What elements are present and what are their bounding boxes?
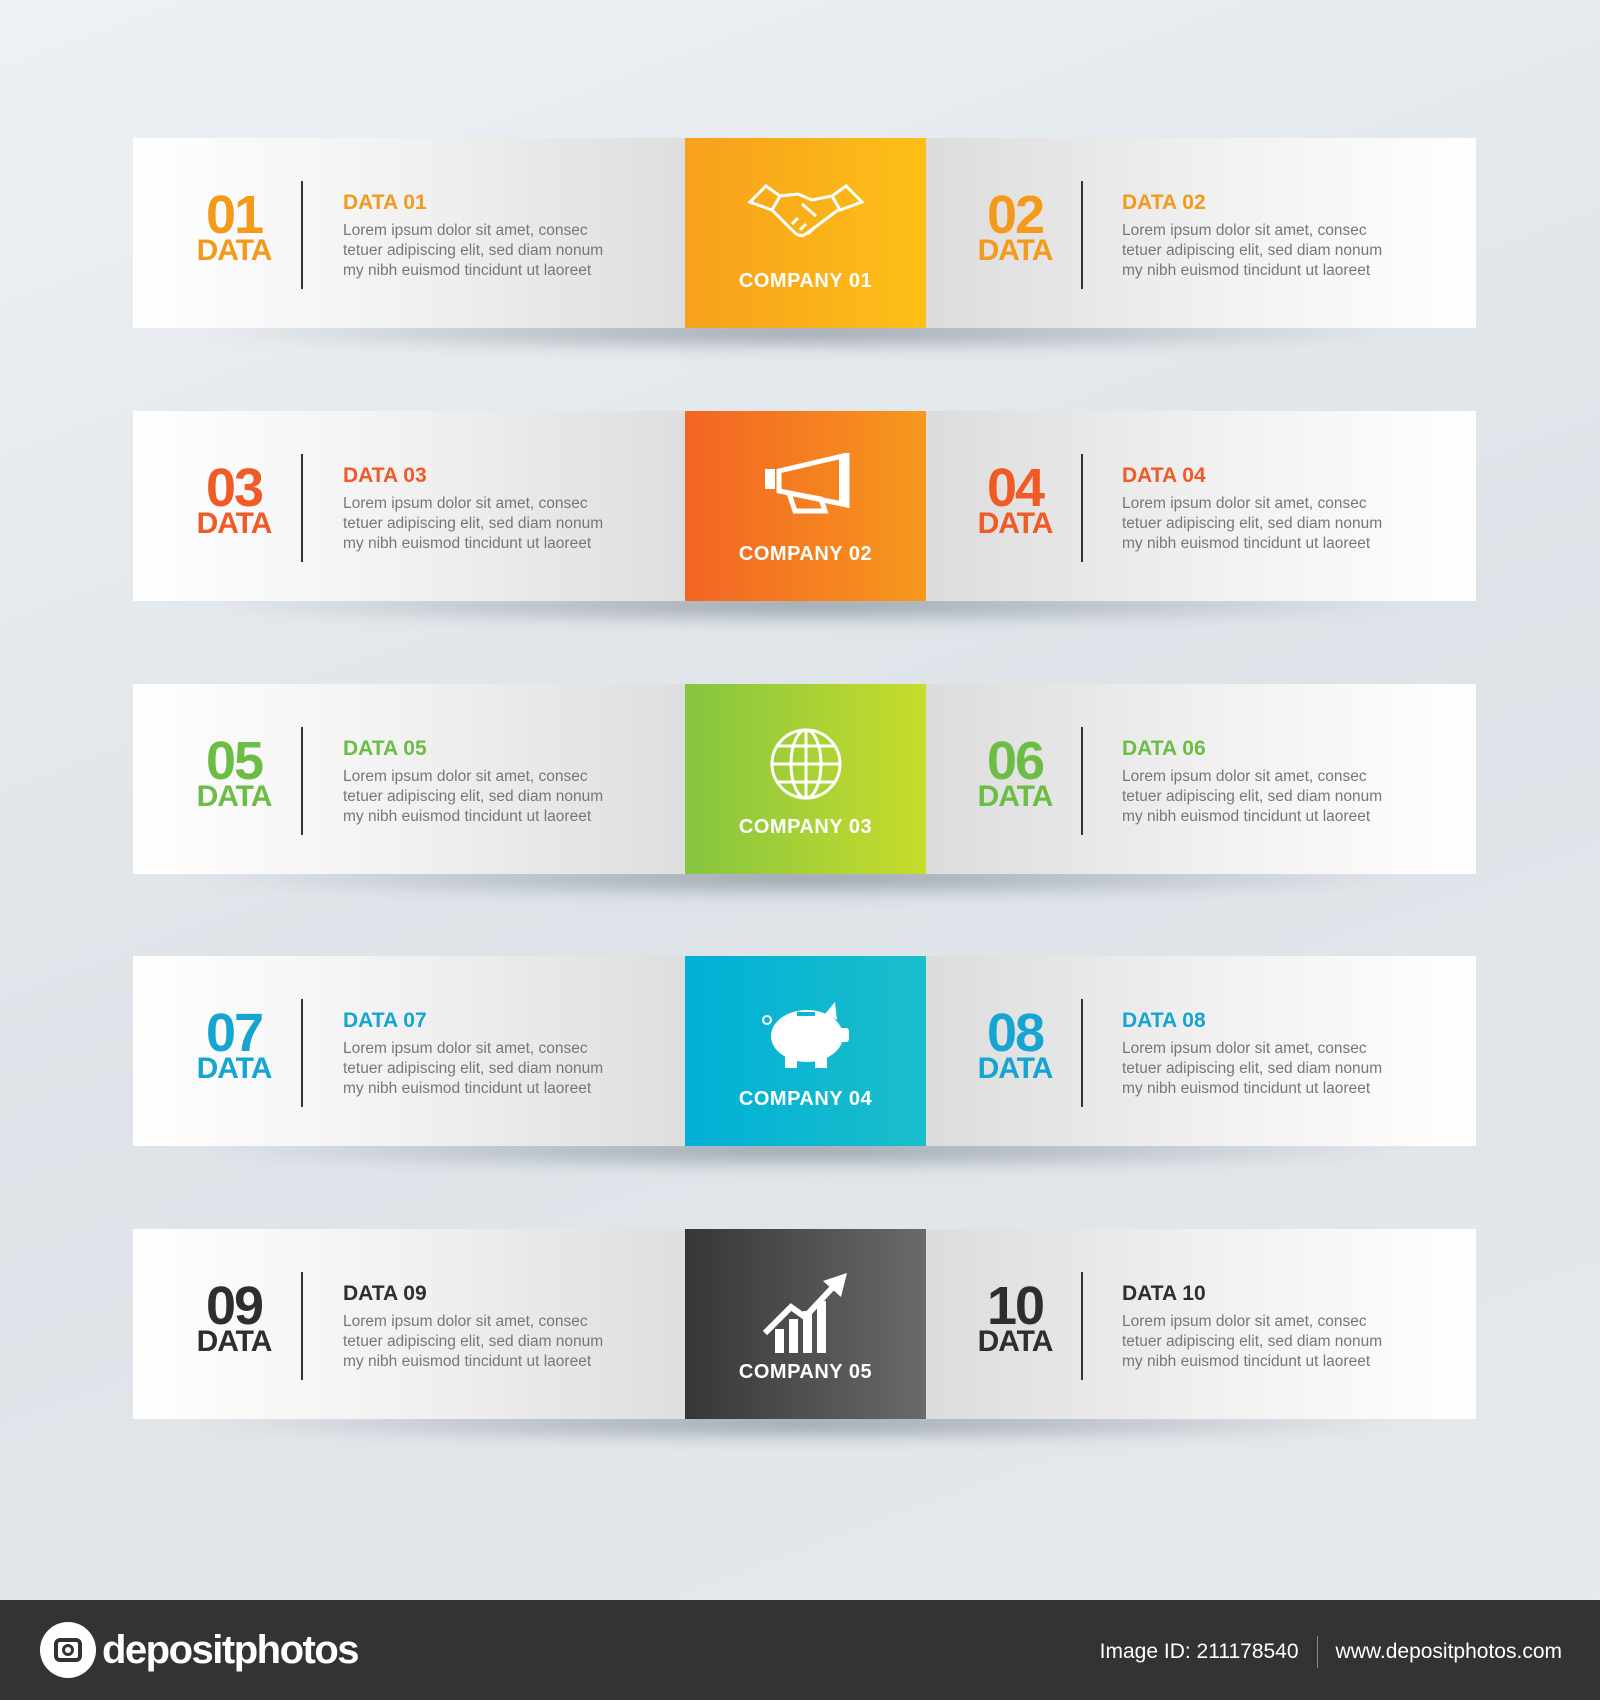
number 04 xyxy=(978,458,1053,540)
center: company 03 xyxy=(685,684,926,874)
panel: data 09 xyxy=(133,1229,685,1419)
footer info: Image ID: 211178540 xyxy=(1100,1640,1299,1663)
center: company 02: COMPANY 02 xyxy=(739,543,872,565)
text: data 08: Lorem ipsum dolor sit amet, consec xyxy=(1122,1040,1367,1057)
number 03: 03 xyxy=(206,458,262,518)
text: data 08: my nibh euismod tincidunt ut laoreet xyxy=(1122,1080,1370,1097)
text: data 05: DATA 05 xyxy=(343,737,427,760)
number 03: DATA xyxy=(197,507,271,540)
number 02: 02 xyxy=(987,185,1043,245)
text: data 05: tetuer adipiscing elit, sed diam nonum xyxy=(343,788,603,805)
text: data 10: my nibh euismod tincidunt ut laoreet xyxy=(1122,1353,1370,1370)
text: data 10: DATA 10 xyxy=(1122,1282,1206,1305)
text: data 07: Lorem ipsum dolor sit amet, consec xyxy=(343,1040,588,1057)
text: data 06: Lorem ipsum dolor sit amet, consec xyxy=(1122,768,1367,785)
icon: growth chart xyxy=(763,1273,847,1353)
panel: data 07 xyxy=(133,956,685,1146)
number 10 xyxy=(978,1276,1053,1358)
number 10: 10 xyxy=(987,1276,1043,1336)
text: data 02: tetuer adipiscing elit, sed diam nonum xyxy=(1122,242,1382,259)
center: company 01 xyxy=(685,138,926,328)
panel: data 03 xyxy=(133,411,685,601)
text: data 10 xyxy=(1122,1282,1382,1370)
footer info: www.depositphotos.com xyxy=(1336,1640,1562,1663)
number 02: DATA xyxy=(978,234,1052,267)
number 07 xyxy=(197,1003,272,1085)
row 5 xyxy=(133,1229,1476,1444)
text: data 07: DATA 07 xyxy=(343,1009,427,1032)
text: data 08: DATA 08 xyxy=(1122,1009,1206,1032)
text: data 09 xyxy=(343,1282,603,1370)
text: data 09: tetuer adipiscing elit, sed diam nonum xyxy=(343,1333,603,1350)
text: data 02: DATA 02 xyxy=(1122,191,1206,214)
number 06: 06 xyxy=(987,731,1043,791)
number 03 xyxy=(197,458,272,540)
center: company 04: COMPANY 04 xyxy=(739,1088,872,1110)
text: data 04: DATA 04 xyxy=(1122,464,1206,487)
number 08: 08 xyxy=(987,1003,1043,1063)
text: data 02: Lorem ipsum dolor sit amet, consec xyxy=(1122,222,1367,239)
text: data 08 xyxy=(1122,1009,1382,1097)
text: data 01 xyxy=(343,191,603,279)
number 05 xyxy=(197,731,272,813)
panel: data 04 xyxy=(926,411,1476,601)
row 2 xyxy=(133,411,1476,626)
number 08: DATA xyxy=(978,1052,1052,1085)
number 08 xyxy=(978,1003,1053,1085)
text: data 09: Lorem ipsum dolor sit amet, consec xyxy=(343,1313,588,1330)
text: data 05: Lorem ipsum dolor sit amet, consec xyxy=(343,768,588,785)
icon: globe xyxy=(770,728,842,800)
row 4 xyxy=(133,956,1476,1172)
text: data 04: Lorem ipsum dolor sit amet, consec xyxy=(1122,495,1367,512)
footer logo xyxy=(40,1622,358,1678)
footer logo: depositphotos xyxy=(102,1628,358,1672)
text: data 07: my nibh euismod tincidunt ut laoreet xyxy=(343,1080,591,1097)
number 10: DATA xyxy=(978,1325,1052,1358)
text: data 04: tetuer adipiscing elit, sed diam nonum xyxy=(1122,515,1382,532)
text: data 03: my nibh euismod tincidunt ut laoreet xyxy=(343,535,591,552)
number 04: 04 xyxy=(987,458,1043,518)
text: data 08: tetuer adipiscing elit, sed diam nonum xyxy=(1122,1060,1382,1077)
text: data 03: tetuer adipiscing elit, sed diam nonum xyxy=(343,515,603,532)
panel: data 02 xyxy=(926,138,1476,328)
number 07: DATA xyxy=(197,1052,271,1085)
number 01 xyxy=(197,185,272,267)
text: data 06: DATA 06 xyxy=(1122,737,1206,760)
icon: megaphone xyxy=(765,453,850,514)
center: company 02 xyxy=(685,411,926,601)
number 09: 09 xyxy=(206,1276,262,1336)
text: data 05: my nibh euismod tincidunt ut laoreet xyxy=(343,808,591,825)
text: data 03: Lorem ipsum dolor sit amet, consec xyxy=(343,495,588,512)
row 3 xyxy=(133,684,1476,900)
text: data 06: tetuer adipiscing elit, sed diam nonum xyxy=(1122,788,1382,805)
text: data 06 xyxy=(1122,737,1382,825)
text: data 03: DATA 03 xyxy=(343,464,427,487)
panel: data 08 xyxy=(926,956,1476,1146)
text: data 01: my nibh euismod tincidunt ut laoreet xyxy=(343,262,591,279)
text: data 10: tetuer adipiscing elit, sed diam nonum xyxy=(1122,1333,1382,1350)
text: data 01: DATA 01 xyxy=(343,191,427,214)
number 05: 05 xyxy=(206,731,262,791)
footer info xyxy=(1100,1636,1562,1668)
row 1 xyxy=(133,138,1476,354)
panel: data 05 xyxy=(133,684,685,874)
number 09 xyxy=(197,1276,272,1358)
center: company 01: COMPANY 01 xyxy=(739,270,872,292)
center: company 05: COMPANY 05 xyxy=(739,1361,872,1383)
text: data 02: my nibh euismod tincidunt ut laoreet xyxy=(1122,262,1370,279)
text: data 04 xyxy=(1122,464,1382,552)
text: data 06: my nibh euismod tincidunt ut laoreet xyxy=(1122,808,1370,825)
icon: handshake xyxy=(747,184,865,238)
center: company 03: COMPANY 03 xyxy=(739,816,872,838)
center: company 04 xyxy=(685,956,926,1146)
text: data 09: DATA 09 xyxy=(343,1282,427,1305)
number 06: DATA xyxy=(978,780,1052,813)
text: data 05 xyxy=(343,737,603,825)
footer bar xyxy=(0,1600,1600,1700)
number 04: DATA xyxy=(978,507,1052,540)
text: data 04: my nibh euismod tincidunt ut laoreet xyxy=(1122,535,1370,552)
icon: piggy bank xyxy=(762,1002,849,1068)
number 09: DATA xyxy=(197,1325,271,1358)
text: data 02 xyxy=(1122,191,1382,279)
center: company 05 xyxy=(685,1229,926,1419)
text: data 10: Lorem ipsum dolor sit amet, consec xyxy=(1122,1313,1367,1330)
text: data 01: Lorem ipsum dolor sit amet, consec xyxy=(343,222,588,239)
text: data 01: tetuer adipiscing elit, sed diam nonum xyxy=(343,242,603,259)
number 01: 01 xyxy=(206,185,262,245)
panel: data 01 xyxy=(133,138,685,328)
number 02 xyxy=(978,185,1053,267)
panel: data 06 xyxy=(926,684,1476,874)
text: data 07: tetuer adipiscing elit, sed diam nonum xyxy=(343,1060,603,1077)
panel: data 10 xyxy=(926,1229,1476,1419)
number 01: DATA xyxy=(197,234,271,267)
text: data 03 xyxy=(343,464,603,552)
text: data 07 xyxy=(343,1009,603,1097)
number 07: 07 xyxy=(206,1003,262,1063)
text: data 09: my nibh euismod tincidunt ut laoreet xyxy=(343,1353,591,1370)
number 05: DATA xyxy=(197,780,271,813)
number 06 xyxy=(978,731,1053,813)
